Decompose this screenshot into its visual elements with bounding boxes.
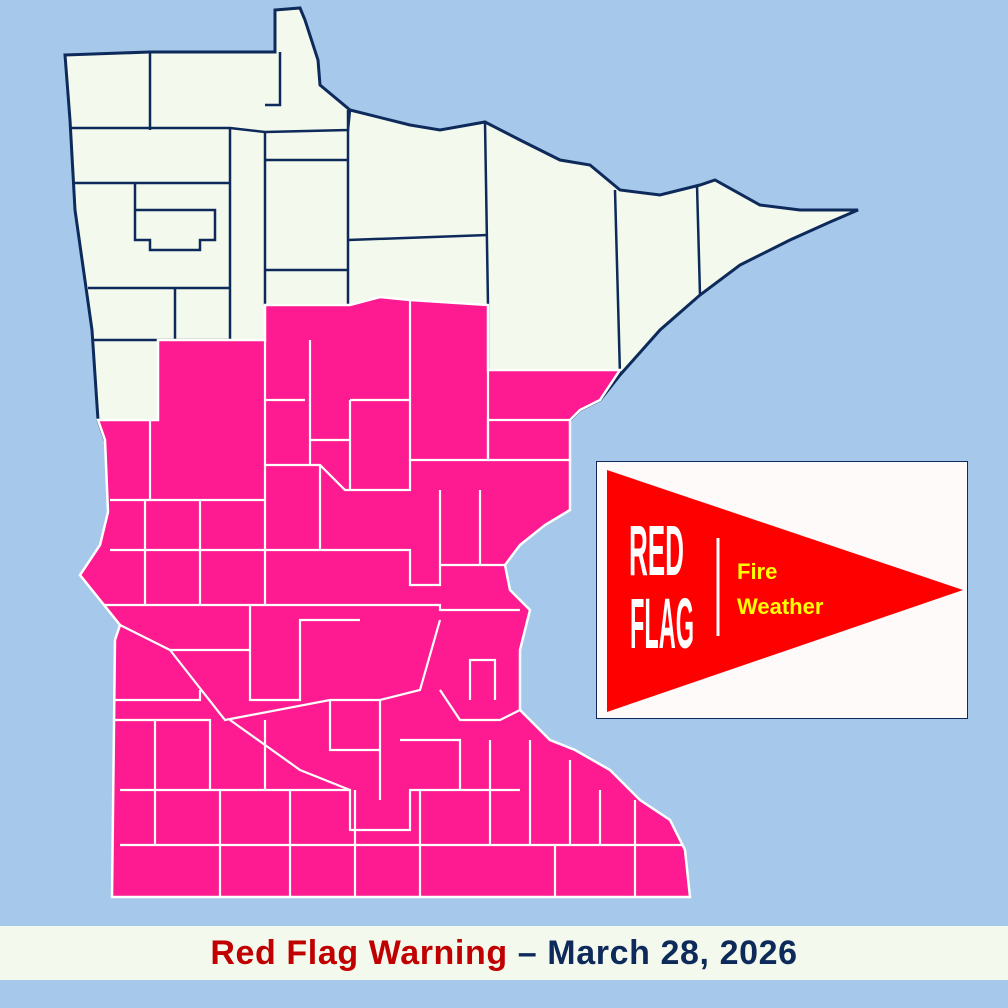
flag text RED FLAG <box>629 512 694 664</box>
flag text Fire Weather: Weather <box>737 594 824 619</box>
title banner <box>0 926 1008 980</box>
title banner: Red Flag Warning – March 28, 2026 <box>210 934 798 972</box>
northern counties (no warning) <box>65 8 858 440</box>
red flag warning area (pink counties) <box>80 297 690 897</box>
flag text RED FLAG: RED <box>629 512 684 591</box>
flag text Fire Weather <box>737 559 824 619</box>
map of Minnesota <box>63 6 859 898</box>
flag text RED FLAG: FLAG <box>630 585 694 664</box>
red flag fire weather logo <box>596 461 968 719</box>
icon: red pennant <box>607 470 963 712</box>
flag text Fire Weather: Fire <box>737 559 777 584</box>
